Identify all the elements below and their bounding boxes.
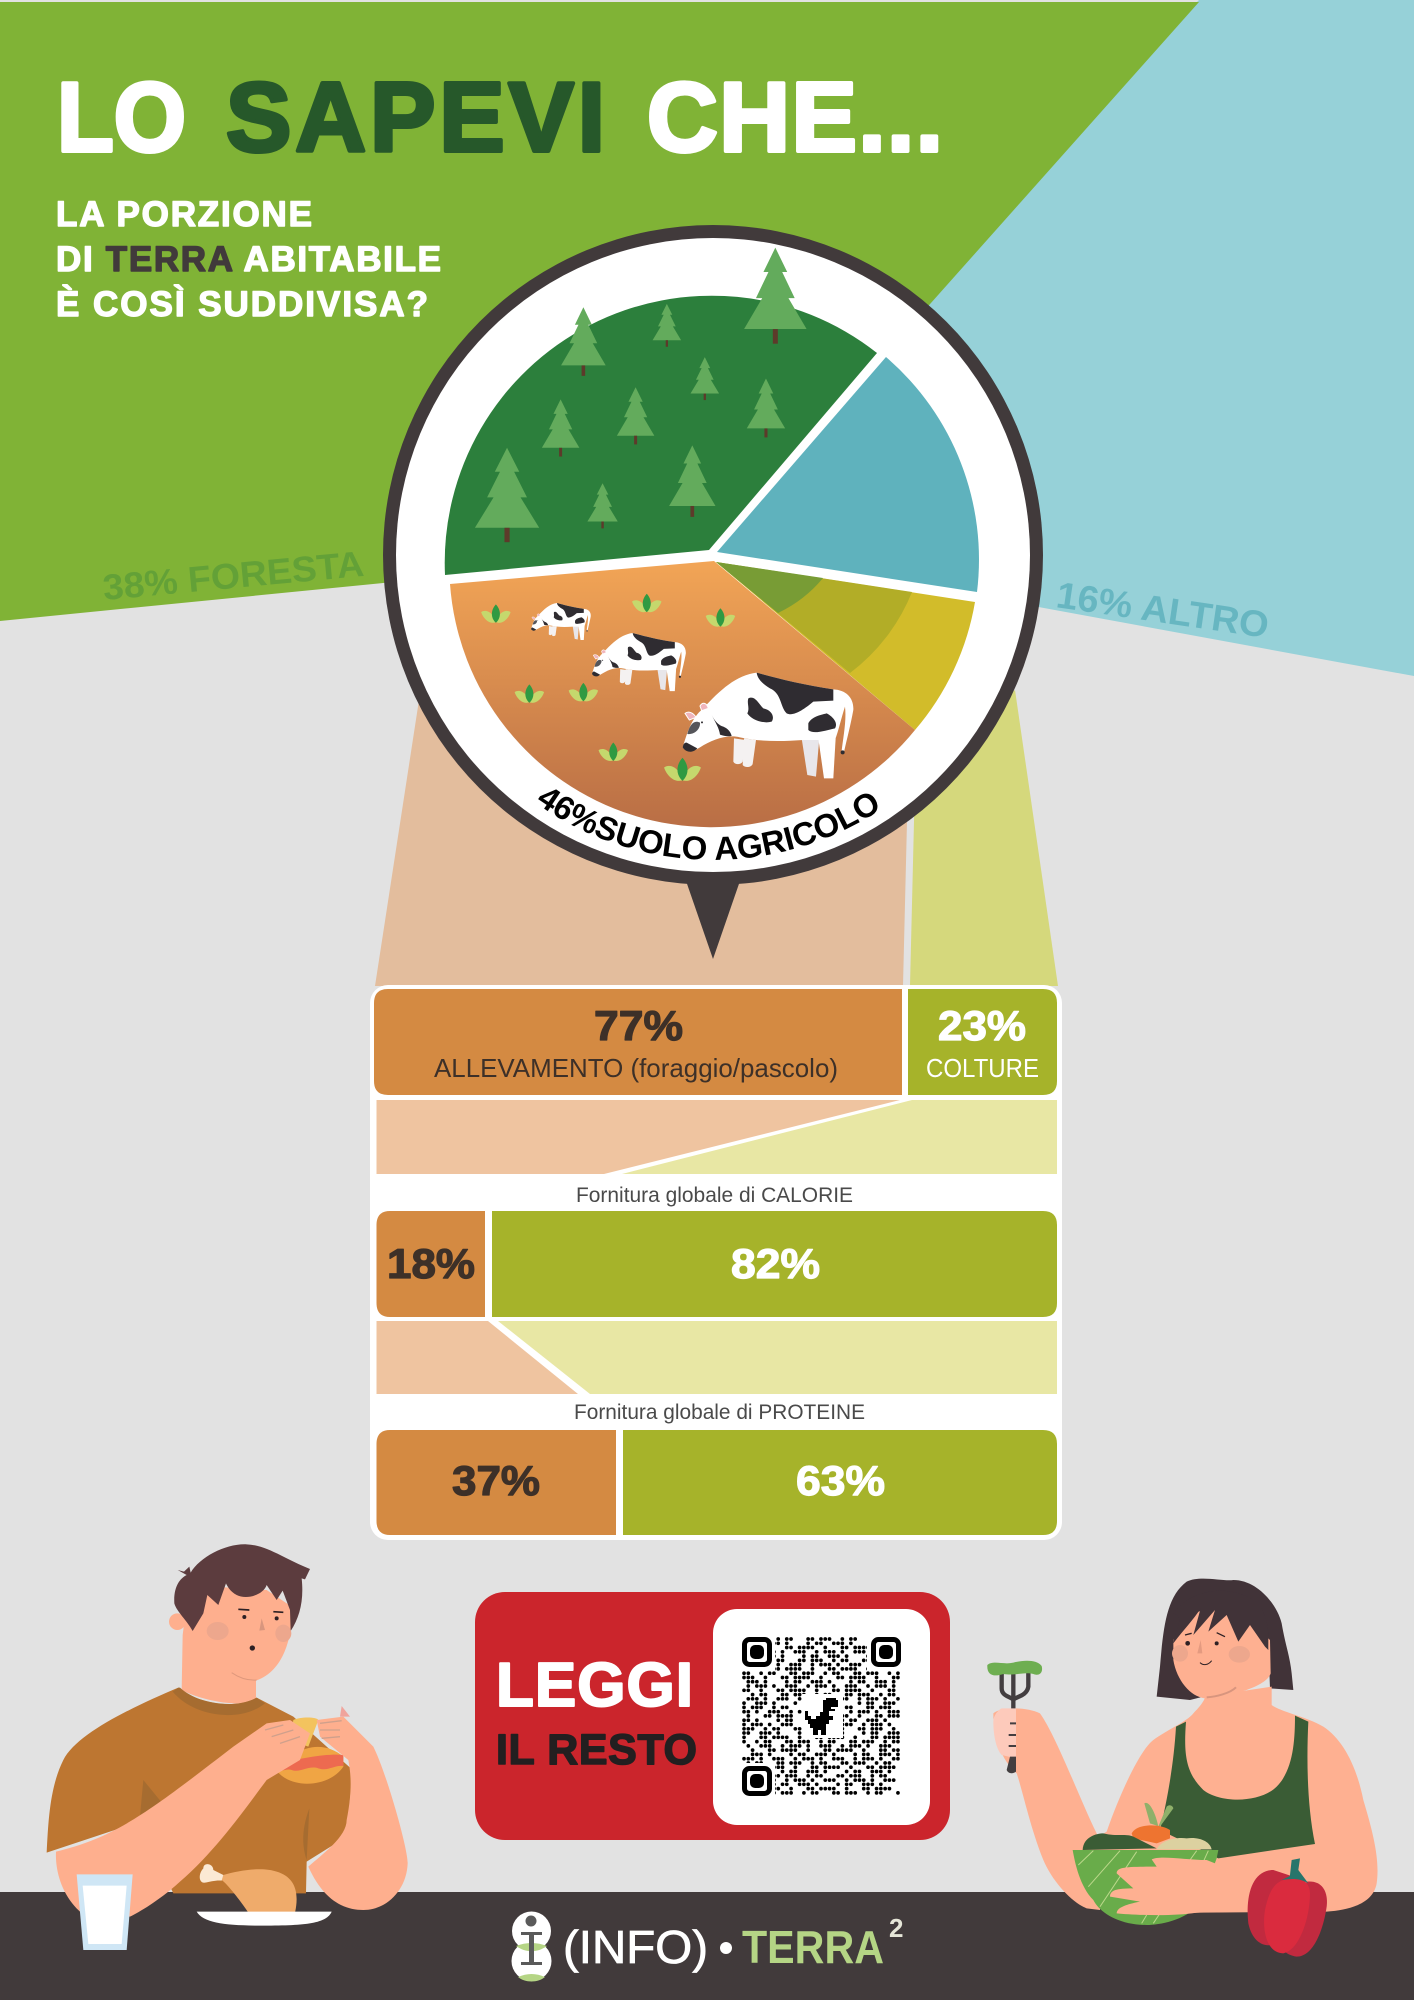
title xyxy=(57,62,943,172)
woman: hair back xyxy=(1157,1579,1293,1700)
man: shirt xyxy=(47,1688,353,1893)
cta: il resto: IL RESTO xyxy=(496,1726,697,1774)
wordmark: superscript 2: 2 xyxy=(889,1913,903,1943)
icon: dinosaur xyxy=(805,1698,838,1735)
woman: raised arm xyxy=(993,1708,1103,1910)
flow band 2 xyxy=(376,1321,1057,1394)
man: face details xyxy=(207,1609,291,1680)
woman: bowl xyxy=(1073,1850,1218,1925)
woman: tank top xyxy=(1160,1716,1315,1858)
title: CHE... xyxy=(647,62,943,172)
woman: torso xyxy=(1093,1687,1378,1917)
title: LO xyxy=(57,62,186,172)
connector: peach area to allevamento xyxy=(375,700,908,986)
callout circle xyxy=(383,225,1043,959)
value: 63%: 63% xyxy=(796,1457,885,1504)
woman: face details xyxy=(1172,1633,1250,1697)
man: neck and head xyxy=(169,1587,292,1703)
man: burger xyxy=(277,1717,343,1784)
label: colture: COLTURE xyxy=(926,1053,1039,1083)
illustration: woman eating salad xyxy=(987,1579,1378,1957)
subtitle xyxy=(56,195,441,324)
bar: proteine 37% xyxy=(376,1430,616,1535)
pie slice: altro xyxy=(717,357,979,592)
bar: calorie 82% xyxy=(492,1211,1057,1317)
label: 38% foresta: 38% FORESTA xyxy=(101,543,366,608)
man: arms and hands xyxy=(56,1706,408,1917)
cta: leggi: LEGGI xyxy=(496,1651,693,1720)
wordmark: terra: TERRA xyxy=(742,1921,884,1973)
pie slice: foresta xyxy=(445,296,877,575)
flow band 1 xyxy=(376,1100,1057,1174)
card: leggi il resto xyxy=(475,1592,950,1840)
blue wedge: altro xyxy=(900,0,1414,676)
separator dot xyxy=(720,1942,732,1954)
man: collar and shirt shadows xyxy=(139,1688,309,1860)
curved label: suolo agricolo: 46%SUOLO AGRICOLO xyxy=(538,789,878,860)
caption: proteine: Fornitura globale di PROTEINE xyxy=(574,1401,865,1424)
value: 23%: 23% xyxy=(938,1002,1026,1049)
woman: red pepper xyxy=(1248,1858,1327,1957)
bar: colture xyxy=(908,989,1057,1095)
trees xyxy=(475,248,807,542)
cows xyxy=(531,603,853,778)
value: 37%: 37% xyxy=(452,1457,540,1504)
bar: allevamento xyxy=(374,989,902,1095)
logo: info terra xyxy=(512,1912,903,1982)
man: hair xyxy=(174,1544,310,1631)
value: 18%: 18% xyxy=(387,1240,475,1287)
woman: hand on bowl xyxy=(1110,1858,1253,1915)
label: 16% altro: 16% ALTRO xyxy=(1054,574,1272,646)
sprouts xyxy=(481,594,735,781)
illustration: man eating burger xyxy=(47,1544,408,1950)
label: allevamento: ALLEVAMENTO (foraggio/pascolo) xyxy=(434,1053,838,1083)
subtitle: LA PORZIONE xyxy=(56,195,312,234)
pointer xyxy=(685,878,741,959)
green wedge: foresta xyxy=(0,2,1199,621)
man: plate xyxy=(197,1912,332,1926)
man: chicken leg xyxy=(200,1864,297,1913)
pie slice: allevamento pasture xyxy=(450,561,915,827)
bar: calorie 18% xyxy=(376,1211,485,1317)
man: glass of milk xyxy=(77,1874,133,1950)
panel: breakdown bars xyxy=(370,985,1062,1540)
value: 77%: 77% xyxy=(594,1002,683,1049)
subtitle: È COSÌ SUDDIVISA? xyxy=(56,284,428,324)
subtitle: DI TERRA ABITABILE xyxy=(56,240,441,279)
woman: salad food xyxy=(1083,1803,1212,1850)
wordmark: info: (INFO) xyxy=(563,1921,708,1973)
value: 82%: 82% xyxy=(731,1240,820,1287)
connector: pale green area to colture xyxy=(910,690,1058,986)
qr panel xyxy=(713,1609,930,1825)
woman: fork with lettuce xyxy=(987,1661,1042,1773)
woman: face xyxy=(1173,1600,1271,1698)
pie slice: colture xyxy=(716,562,975,730)
qr code xyxy=(740,1634,903,1799)
woman: fringe xyxy=(1173,1591,1268,1650)
table footer band xyxy=(0,1892,1414,2000)
caption: calorie: Fornitura globale di CALORIE xyxy=(576,1184,853,1207)
bar: proteine 63% xyxy=(623,1430,1057,1535)
icon: info logo xyxy=(512,1912,552,1982)
title: SAPEVI xyxy=(226,62,605,172)
